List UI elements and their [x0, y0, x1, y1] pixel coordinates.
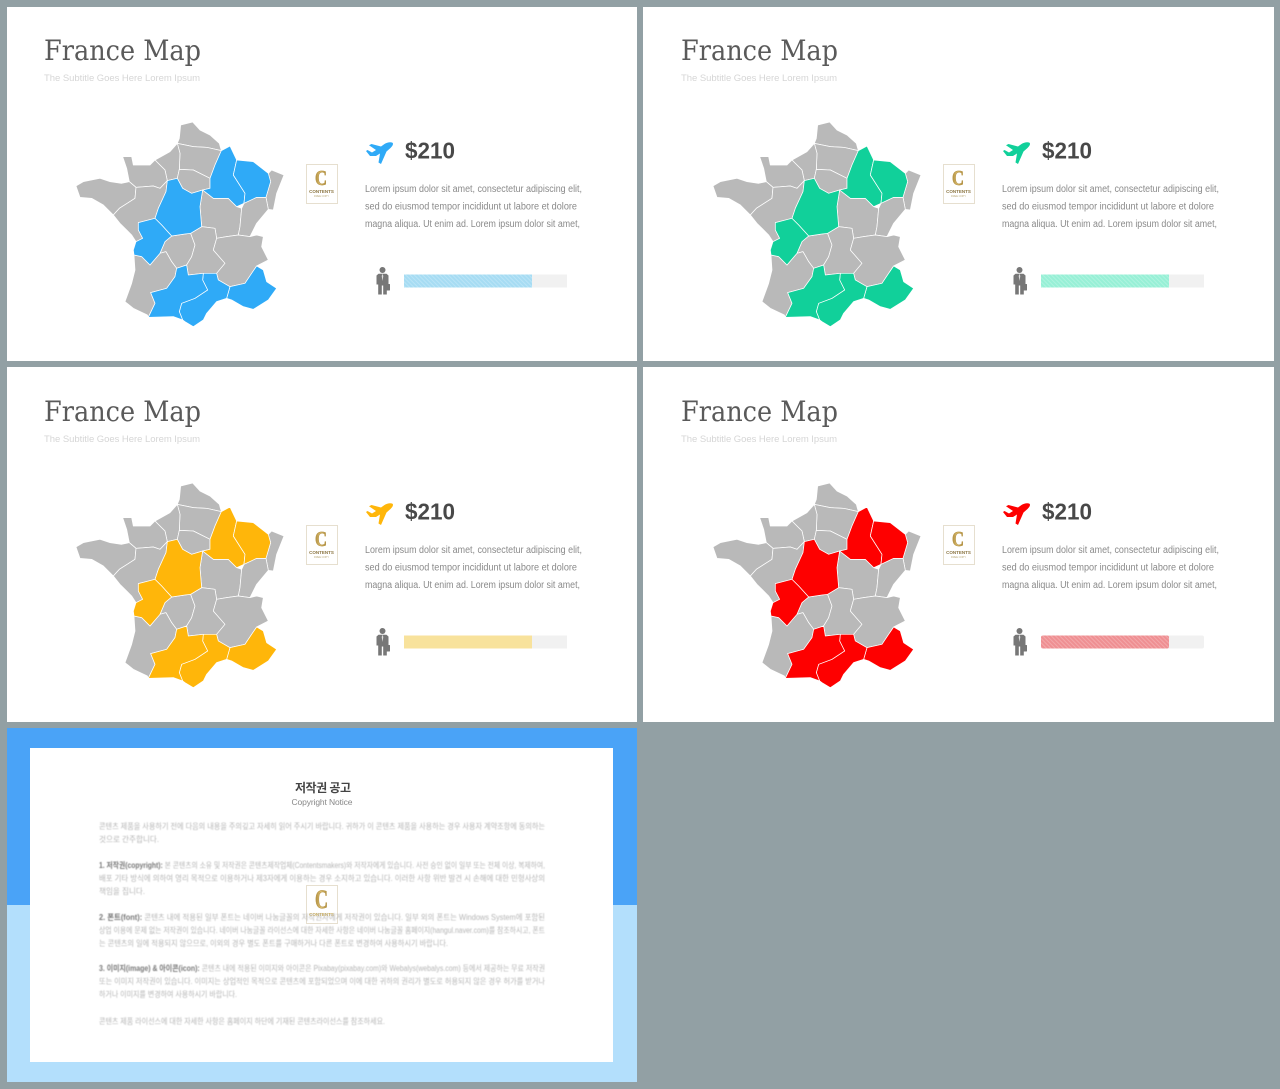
paragraph: font: 는 콘텐츠의 일에 적용되지 않으므로, 이외의 경우 별도 폰트를 구매하거나 다른 폰트로 변경하여 사용하시기 바랍니다.	[99, 938, 448, 948]
panel: France map blue	[7, 7, 637, 361]
logo watermark	[306, 885, 338, 924]
paragraph: image and icon: 3. 이미지(image) & 아이콘(icon): 콘텐츠 내에 적용된 이미지와 아이콘은 Pixabay(pixabay.com)와 Webalys(webalys.com) 등에서 제공하는 무료 저작권	[99, 963, 545, 973]
paragraph: font: 2. 폰트(font): 콘텐츠 내에 적용된 일부 폰트는 네이버 나눔글꼴의 저작권자에게 저작권이 있습니다. 일부 외의 폰트는 Windows System에 포함된	[99, 912, 545, 922]
logo: C	[952, 527, 964, 551]
description text: magna aliqua. Ut enim ad. Lorem ipsum dolor sit amet,	[365, 580, 580, 591]
paragraph: image and icon: 또는 이미지 저작권이 있습니다. 이미지는 상업적인 목적으로 콘텐츠에 포함되었으며 이에 대한 귀하의 권리가 별도로 허용되지 않은 경우 허가를 받거나	[99, 976, 546, 986]
description text	[1002, 545, 1219, 591]
logo	[306, 526, 338, 564]
icon: plane	[366, 503, 393, 525]
logo	[306, 164, 338, 204]
subtitle: The Subtitle Goes Here Lorem Ipsum	[681, 73, 837, 84]
panel: copyright notice	[7, 728, 637, 1082]
map of France	[76, 483, 284, 688]
paragraph: font	[99, 912, 545, 948]
intro text: 콘텐츠 제품을 사용하기 전에 다음의 내용을 주의깊고 자세히 읽어 주시기 바랍니다. 귀하가 이 콘텐츠 제품을 사용하는 경우 사용자 계약조항에 동의하는	[99, 821, 545, 831]
paragraph: image and icon: 하거나 이미지를 변경하여 사용하시기 바랍니다.	[99, 989, 237, 999]
logo: CONTENTS	[946, 189, 971, 194]
title: France Map	[681, 34, 838, 67]
icon: businessman	[1014, 267, 1027, 294]
logo: CONTENTS	[946, 550, 971, 555]
progress bar	[1041, 274, 1204, 288]
logo: CONTENTS	[309, 550, 334, 555]
description text: Lorem ipsum dolor sit amet, consectetur adipiscing elit,	[1002, 184, 1219, 195]
icon: plane	[366, 142, 393, 164]
subheading: Copyright Notice	[292, 797, 353, 807]
subtitle: The Subtitle Goes Here Lorem Ipsum	[44, 434, 200, 445]
description text: sed do eiusmod tempor incididunt ut labore et dolore	[1002, 202, 1214, 212]
icon: businessman	[1014, 628, 1027, 656]
paragraph: image and icon	[99, 963, 546, 999]
panel: France map red	[643, 367, 1274, 722]
description text	[365, 545, 582, 591]
description text: magna aliqua. Ut enim ad. Lorem ipsum dolor sit amet,	[365, 219, 580, 230]
progress bar	[1041, 636, 1204, 648]
title: France Map	[681, 395, 838, 428]
map of France	[713, 122, 921, 327]
logo: FREE COPY	[314, 555, 329, 559]
panel: France map yellow	[7, 367, 637, 722]
logo: FREE COPY	[314, 194, 329, 198]
logo: FREE COPY	[951, 194, 966, 198]
logo: CONTENTS	[309, 189, 334, 194]
icon: plane	[1003, 503, 1030, 525]
description text: sed do eiusmod tempor incididunt ut labore et dolore	[365, 202, 577, 212]
intro text: 것으로 간주합니다.	[99, 834, 159, 844]
logo: C	[315, 527, 327, 551]
logo: C	[315, 166, 327, 190]
description text: Lorem ipsum dolor sit amet, consectetur adipiscing elit,	[365, 184, 582, 195]
heading: copyright notice: 저작권 공고	[295, 780, 351, 795]
paragraph: copyright: 1. 저작권(copyright): 본 콘텐츠의 소유 및 저작권은 콘텐츠제작업체(Contentsmakers)와 저작자에게 있습니다. 사전 승인 없이 일부 또는 전체 이상, 복제하여,	[99, 860, 545, 870]
icon: plane	[1003, 142, 1030, 164]
intro text	[99, 821, 545, 844]
price: $210	[1042, 498, 1092, 524]
logo watermark: CONTENTS	[309, 912, 334, 917]
price: $210	[405, 138, 455, 164]
logo watermark: C	[315, 885, 328, 914]
logo	[944, 526, 974, 564]
subtitle: The Subtitle Goes Here Lorem Ipsum	[681, 434, 837, 445]
map of France	[713, 483, 921, 688]
subtitle: The Subtitle Goes Here Lorem Ipsum	[44, 73, 200, 84]
description text: sed do eiusmod tempor incididunt ut labore et dolore	[365, 562, 577, 574]
price: $210	[1042, 138, 1092, 164]
icon: businessman	[376, 267, 390, 294]
description text: magna aliqua. Ut enim ad. Lorem ipsum dolor sit amet,	[1002, 219, 1217, 230]
closing note: 콘텐츠 제품 라이선스에 대한 자세한 사항은 홈페이지 하단에 기재된 콘텐츠라이선스를 참조하세요.	[99, 1016, 385, 1026]
map of France	[76, 122, 284, 327]
title: France Map	[44, 34, 201, 67]
description text	[1002, 184, 1219, 230]
paragraph: copyright	[99, 860, 545, 896]
description text: Lorem ipsum dolor sit amet, consectetur adipiscing elit,	[365, 545, 582, 556]
panel: France map green	[643, 7, 1274, 361]
paragraph: font: 상업 이용에 문제 없는 저작권이 있습니다. 네이버 나눔글꼴 라이선스에 대한 자세한 사항은 네이버 나눔글꼴 홈페이지(hangul.naver.com)를 참조하시고, 폰트	[99, 925, 545, 935]
icon: businessman	[376, 628, 390, 656]
paragraph: copyright: 배포 기타 방식에 의하여 영리 목적으로 이용하거나 제3자에게 이용하는 경우 소지하고 있습니다. 이러한 사항 위반 발견 시 손해에 대한 민형사상의	[99, 873, 545, 883]
progress bar	[404, 274, 567, 288]
description text: sed do eiusmod tempor incididunt ut labore et dolore	[1002, 562, 1214, 574]
progress bar	[404, 636, 567, 648]
paragraph: copyright: 책임을 집니다.	[99, 886, 145, 896]
logo	[944, 164, 974, 204]
description text: magna aliqua. Ut enim ad. Lorem ipsum dolor sit amet,	[1002, 580, 1217, 591]
logo: C	[952, 166, 964, 190]
price: $210	[405, 498, 455, 524]
title: France Map	[44, 395, 201, 428]
logo: FREE COPY	[951, 555, 966, 559]
description text: Lorem ipsum dolor sit amet, consectetur adipiscing elit,	[1002, 545, 1219, 556]
description text	[365, 184, 582, 230]
